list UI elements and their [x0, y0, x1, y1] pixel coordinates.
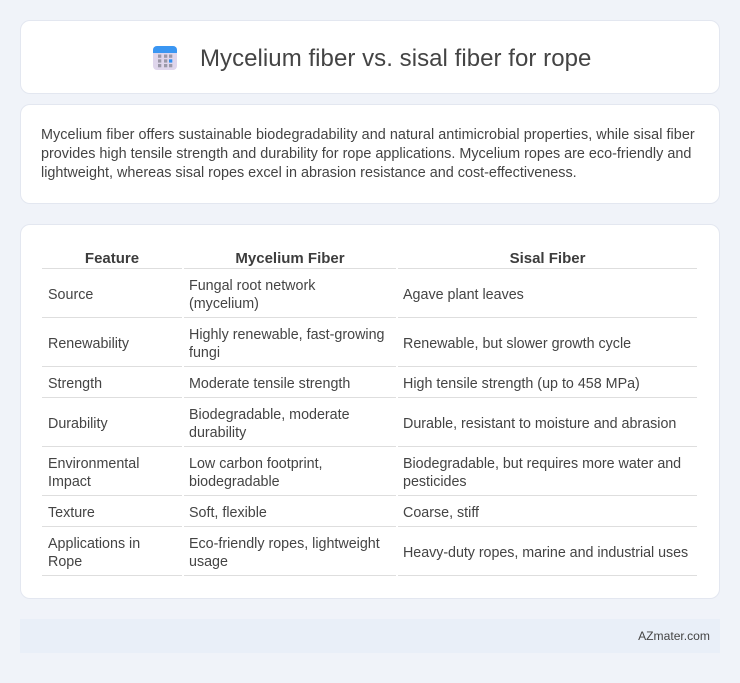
- panel: comparison table: [20, 224, 720, 599]
- row: renewability: Renewable, but slower growth cycle: [403, 336, 631, 352]
- row: applications in rope: Eco-friendly ropes, lightweight: [189, 536, 380, 552]
- table header: Sisal Fiber: [510, 250, 585, 267]
- row: renewability: [42, 327, 697, 367]
- summary text: provides high tensile strength and durability for rope applications. Mycelium ropes are eco-friendly and: [41, 146, 691, 162]
- table header: Feature: [85, 250, 139, 267]
- panel: title card: [20, 20, 720, 94]
- row: environmental impact: Low carbon footprint,: [189, 456, 323, 472]
- icon: calendar: [153, 46, 177, 70]
- row: durability: Biodegradable, moderate: [189, 407, 350, 423]
- row: texture: Texture: [48, 505, 95, 521]
- row: durability: durability: [189, 425, 246, 441]
- row: texture: [42, 505, 697, 527]
- row: strength: High tensile strength (up to 458 MPa): [403, 376, 640, 392]
- row: environmental impact: biodegradable: [189, 474, 280, 490]
- summary text: Mycelium fiber offers sustainable biodegradability and natural antimicrobial properties, while sisal fiber: [41, 127, 695, 143]
- row: source: [42, 278, 697, 318]
- row: texture: Soft, flexible: [189, 505, 267, 521]
- row: environmental impact: Impact: [48, 474, 91, 490]
- row: source: Fungal root network: [189, 278, 315, 294]
- footer source label: AZmater.com: [638, 629, 710, 643]
- row: environmental impact: pesticides: [403, 474, 467, 490]
- row: strength: Moderate tensile strength: [189, 376, 350, 392]
- summary text: lightweight, whereas sisal ropes excel in abrasion resistance and cost-effectiveness.: [41, 165, 577, 181]
- row: strength: Strength: [48, 376, 102, 392]
- row: applications in rope: Rope: [48, 554, 82, 570]
- row: source: (mycelium): [189, 296, 259, 312]
- row: applications in rope: usage: [189, 554, 228, 570]
- row: environmental impact: Environmental: [48, 456, 139, 472]
- footer bar: [20, 619, 720, 653]
- row: source: Source: [48, 287, 93, 303]
- row: environmental impact: [42, 456, 697, 496]
- row: texture: Coarse, stiff: [403, 505, 479, 521]
- row: durability: [42, 407, 697, 447]
- summary text: [41, 127, 695, 181]
- row: durability: Durable, resistant to moisture and abrasion: [403, 416, 676, 432]
- row: strength: [42, 376, 697, 398]
- panel: summary: [20, 104, 720, 204]
- row: renewability: Highly renewable, fast-growing: [189, 327, 384, 343]
- row: renewability: Renewability: [48, 336, 129, 352]
- title: Mycelium fiber vs. sisal fiber for rope: [200, 45, 591, 72]
- row: renewability: fungi: [189, 345, 220, 361]
- row: applications in rope: [42, 536, 697, 576]
- table header: Mycelium Fiber: [235, 250, 345, 267]
- row: applications in rope: Applications in: [48, 536, 140, 552]
- table header: [42, 250, 697, 269]
- row: applications in rope: Heavy-duty ropes, marine and industrial uses: [403, 545, 688, 561]
- row: source: Agave plant leaves: [403, 287, 524, 303]
- row: environmental impact: Biodegradable, but requires more water and: [403, 456, 681, 472]
- row: durability: Durability: [48, 416, 108, 432]
